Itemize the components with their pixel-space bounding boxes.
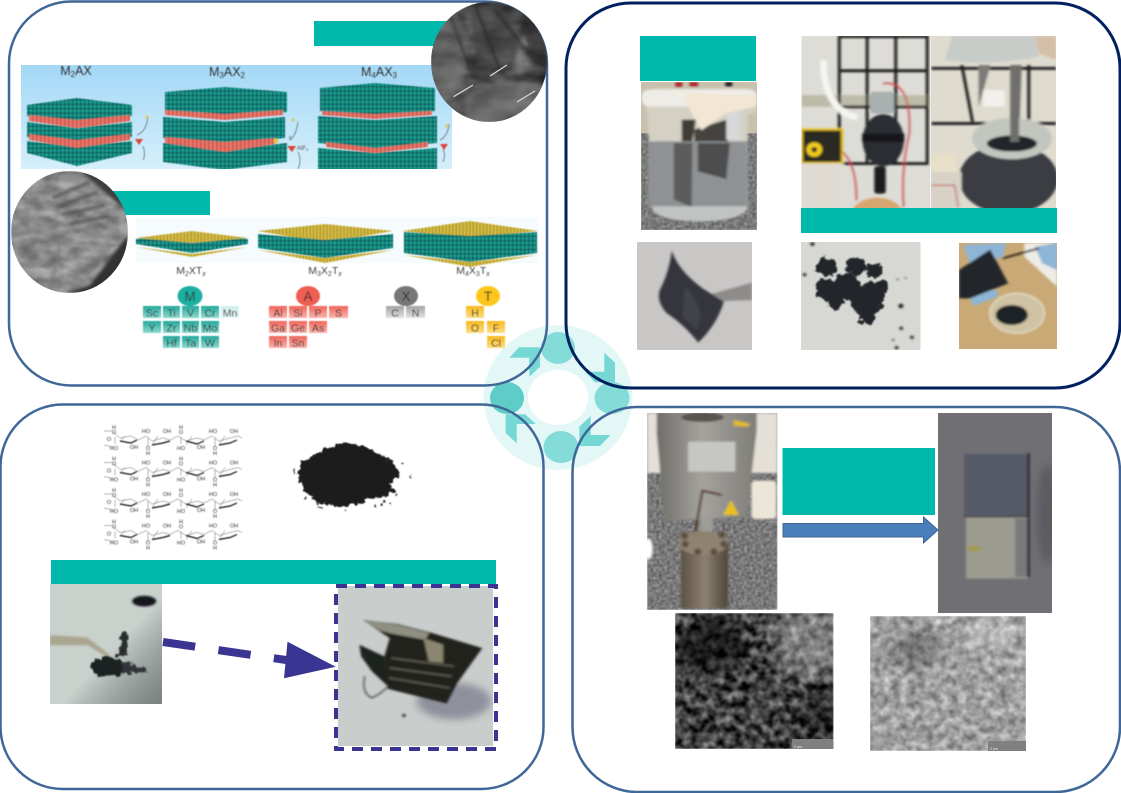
photo: MXene powder clump (801, 242, 920, 350)
cellulose chain row 4: H (213, 546, 217, 552)
element table: A: As (312, 322, 324, 334)
cellulose chain row 1: HO (142, 429, 151, 435)
crystal label M3AX2: M (209, 65, 219, 79)
cellulose chain row 4: O (146, 540, 151, 546)
cellulose chain row 1 (104, 425, 242, 457)
arrow: bottom-left chevron (506, 414, 536, 443)
crystal label M2XTx: 2 (185, 271, 189, 278)
crystal label M2AX: 2 (71, 70, 76, 79)
crystal M2XTx (136, 231, 248, 257)
cellulose chain row 3: HO (209, 492, 218, 498)
cellulose chain row 2: HO (209, 460, 218, 466)
diagram: cellulose chemical structure (104, 425, 242, 552)
cellulose chain row 2: OH (197, 476, 205, 482)
cellulose chain row 2: OH (230, 460, 238, 466)
element table: M: Hf (166, 338, 177, 350)
element table: M: Ti (167, 308, 176, 320)
crystal label M4AX3: 3 (393, 71, 398, 80)
element table: T: O (471, 322, 479, 334)
cellulose chain row 3: O (107, 500, 112, 506)
element table: M: Mo (203, 322, 217, 334)
scale bar (792, 739, 834, 749)
element table: A (269, 286, 348, 350)
heading bar: beaker (640, 36, 756, 81)
element table: M: M (184, 289, 196, 304)
element table: M: V (187, 308, 194, 320)
cellulose chain row 1: H (146, 451, 150, 457)
photo: flexible MXene film (637, 242, 752, 350)
element table: A: Al (273, 308, 283, 320)
element table: M: W (205, 338, 215, 350)
cellulose chain row 2: O (112, 462, 117, 468)
photo: carbonized cellulose sample (338, 586, 493, 746)
crystal label M3AX2: AX (224, 65, 241, 79)
scale label: 2 μm (794, 745, 802, 749)
cellulose chain row 2: OH (163, 460, 171, 466)
element table: X (386, 286, 425, 320)
cellulose chain row 2: H (112, 456, 116, 462)
cellulose chain row 2: H (179, 456, 183, 462)
arrow: top-right chevron (585, 353, 615, 382)
cellulose chain row 2: H (146, 482, 150, 488)
cellulose chain row 1: OH (130, 445, 138, 451)
crystal label M3X2Tx: X (321, 265, 328, 277)
white backdrop (136, 217, 539, 263)
cellulose chain row 3: OH (230, 492, 238, 498)
element table: T (466, 286, 505, 350)
element table: M: Zr (167, 322, 177, 334)
cellulose chain row 2: HO (110, 478, 119, 484)
crystal label M2XTx: M (176, 265, 185, 277)
cellulose chain row 1: H (179, 425, 183, 431)
cellulose chain row 4: OH (197, 540, 205, 546)
cellulose chain row 3: H (146, 514, 150, 520)
heading bar: apparatus (801, 208, 1057, 233)
cellulose chain row 3: H (112, 488, 116, 494)
crystal label M3AX2: 2 (241, 71, 246, 80)
crystal label M4X3Tx: 3 (476, 271, 480, 278)
SEM micrograph: MAX phase (431, 2, 547, 122)
photo: beaker with electrodes (641, 82, 757, 230)
arrow: top-left chevron (509, 347, 540, 377)
element table: M: Sc (146, 308, 158, 320)
etching byproducts: 3 (306, 147, 309, 152)
element table: A: Si (293, 308, 303, 320)
photo: coated electrode on slate (938, 413, 1052, 613)
cellulose chain row 2: HO (142, 460, 151, 466)
cellulose chain row 3: HO (177, 509, 186, 515)
crystal M3AX2 (163, 87, 287, 170)
element table: M: Cr (204, 308, 216, 320)
top node (541, 332, 575, 364)
SEM micrograph: dark spherical particles (675, 610, 842, 749)
cellulose chain row 4: OH (230, 524, 238, 530)
central cycle decoration (484, 325, 632, 470)
cellulose chain row 3: O (213, 509, 218, 515)
crystal label M4X3Tx: 4 (465, 271, 469, 278)
cellulose chain row 2: HO (177, 478, 186, 484)
element table: A: Sn (292, 338, 305, 350)
crystal label M3X2Tx: 2 (328, 271, 332, 278)
right node (594, 382, 630, 414)
cellulose chain row 3: O (179, 493, 184, 499)
arrow: process arrow (783, 517, 938, 543)
cellulose chain row 3: OH (163, 492, 171, 498)
etching byproducts: AlF (297, 146, 306, 152)
cellulose chain row 2: O (179, 462, 184, 468)
crystal label M3X2Tx: x (337, 271, 342, 278)
photo: reactor close-up (931, 36, 1056, 208)
element table: X: X (401, 289, 411, 304)
cellulose chain row 4: O (179, 524, 184, 530)
photo: electrolysis apparatus (801, 36, 930, 208)
SEM micrograph: MXene layers (11, 171, 128, 293)
cellulose chain row 4 (104, 520, 242, 552)
scale bar (988, 741, 1026, 751)
cellulose chain row 4: O (213, 540, 218, 546)
cellulose chain row 3: H (179, 488, 183, 494)
ring backdrop (484, 325, 632, 470)
cellulose chain row 2: O (213, 478, 218, 484)
crystal label M4X3Tx: T (480, 265, 487, 277)
cellulose chain row 1: O (146, 446, 151, 452)
cellulose chain row 4: H (146, 546, 150, 552)
left node (490, 382, 524, 414)
crystal M2AX (27, 98, 132, 166)
cellulose chain row 4: OH (163, 524, 171, 530)
cellulose chain row 4: O (112, 524, 117, 530)
cellulose chain row 3: O (146, 509, 151, 515)
cellulose chain row 2: H (213, 482, 217, 488)
heading bar: middle (110, 191, 210, 215)
element table: A: A (303, 289, 313, 304)
crystal label M2XTx: XT (189, 265, 203, 277)
panel outline (9, 2, 547, 386)
heading bar: carbon electrode (51, 560, 496, 584)
crystal label M3AX2: 3 (219, 71, 224, 80)
cellulose chain row 1: H (213, 451, 217, 457)
crystal label M4AX3: M (361, 65, 371, 79)
cellulose chain row 3: HO (142, 492, 151, 498)
element table: T: Cl (491, 338, 501, 350)
MAX phase crystal illustration (21, 64, 452, 170)
element table: A: In (274, 338, 283, 350)
crystal label M3X2Tx: M (308, 265, 317, 277)
element table: T: F (493, 322, 499, 334)
etching byproducts (135, 116, 449, 169)
crystal M3X2Tx (258, 224, 393, 263)
cellulose chain row 1: OH (163, 429, 171, 435)
panel: carbon electrode preparation (0, 404, 544, 789)
bottom node (544, 431, 578, 463)
cellulose chain row 3 (104, 488, 242, 520)
cellulose chain row 3: O (112, 493, 117, 499)
panel: MAX phase to MXene (9, 2, 547, 386)
photo: tweezers holding sample (50, 584, 162, 704)
cellulose chain row 4: HO (142, 524, 151, 530)
crystal label M2XTx: x (201, 271, 206, 278)
element table: X: N (412, 308, 419, 320)
element table: M: Mn (223, 308, 237, 320)
element table: A: S (335, 308, 342, 320)
crystal label M4X3Tx: x (485, 271, 490, 278)
photo: carbon black powder pile (294, 443, 411, 512)
crystal label M2AX: M (60, 64, 71, 78)
cellulose chain row 2: OH (130, 476, 138, 482)
cellulose chain row 3: OH (197, 508, 205, 514)
cellulose chain row 1: O (112, 430, 117, 436)
cellulose chain row 4: HO (209, 524, 218, 530)
cellulose chain row 4: HO (177, 540, 186, 546)
photo: hydrothermal reactor (647, 413, 778, 610)
cellulose chain row 3: OH (130, 508, 138, 514)
cellulose chain row 1: O (213, 446, 218, 452)
crystal label M4AX3: AX (376, 65, 393, 79)
cellulose chain row 2: O (107, 468, 112, 474)
element table: A: P (314, 308, 322, 320)
cellulose chain row 3: HO (110, 509, 119, 515)
cellulose chain row 1: OH (230, 429, 238, 435)
arrow: bottom-right chevron (579, 416, 611, 446)
element table: M: Nb (184, 322, 197, 334)
element table: T: H (471, 308, 479, 320)
crystal label M4AX3: 4 (371, 71, 376, 80)
cellulose chain row 2 (104, 456, 242, 488)
crystal M4X3Tx (402, 221, 538, 267)
heading bar: top (314, 21, 449, 46)
element table: M: Y (148, 322, 156, 334)
etching byproducts: F (289, 136, 292, 142)
sky backdrop (21, 65, 452, 169)
panel outline (0, 404, 544, 789)
cellulose chain row 4: H (179, 520, 183, 526)
crystal label M3X2Tx: 3 (317, 271, 321, 278)
crystal label M2AX: AX (75, 64, 92, 78)
crystal M4AX3 (318, 83, 437, 170)
panel outline (572, 407, 1120, 792)
cellulose chain row 1: OH (197, 445, 205, 451)
cellulose chain row 1: H (112, 425, 116, 431)
element table: M: Ta (185, 338, 196, 350)
dashed frame around sample (336, 586, 496, 749)
SEM micrograph: light porous particles (870, 616, 1026, 751)
crystal label M4X3Tx: M (456, 265, 465, 277)
cellulose chain row 1: HO (110, 446, 119, 452)
crystal label M3X2Tx: T (332, 265, 339, 277)
element table: M (143, 286, 239, 350)
panel outline (566, 3, 1120, 388)
cellulose chain row 4: O (107, 532, 112, 538)
element table: A: Ge (291, 322, 305, 334)
cellulose chain row 4: H (112, 520, 116, 526)
panel: hydrothermal synthesis (572, 407, 1120, 792)
arrow: dashed process arrow (163, 642, 336, 678)
element table: X: C (391, 308, 399, 320)
cellulose chain row 2: O (146, 478, 151, 484)
photo: MXene paste in dish (959, 243, 1057, 349)
cellulose chain row 1: O (179, 430, 184, 436)
cellulose chain row 4: OH (130, 540, 138, 546)
cellulose chain row 1: HO (177, 446, 186, 452)
cellulose chain row 3: H (213, 514, 217, 520)
element table: A: Ga (271, 322, 285, 334)
cellulose chain row 1: HO (209, 429, 218, 435)
element table: T: T (484, 289, 492, 304)
heading bar: hydrothermal (782, 448, 935, 515)
crystal label M4X3Tx: X (469, 265, 476, 277)
MXene illustration (136, 217, 539, 278)
scale label: 2 μm (990, 747, 998, 751)
cellulose chain row 4: HO (110, 540, 119, 546)
panel: electrochemical delamination (566, 3, 1120, 388)
cellulose chain row 1: O (107, 437, 112, 443)
